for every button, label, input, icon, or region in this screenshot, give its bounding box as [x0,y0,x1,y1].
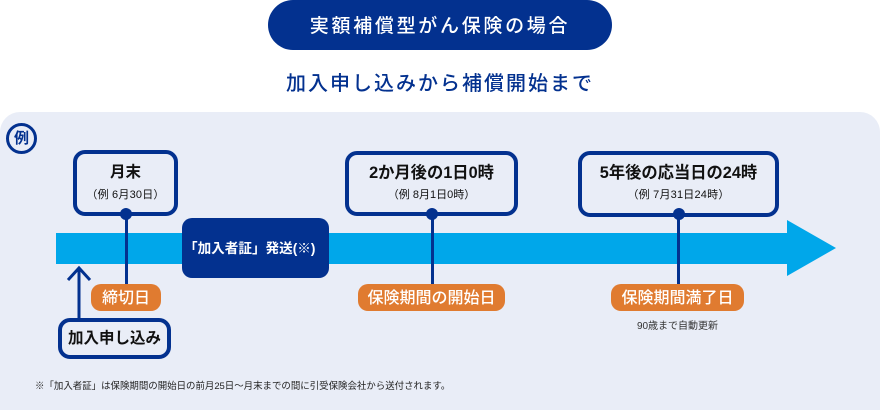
end label: 5年後の応当日の24時 [600,164,757,182]
dot: end date [672,208,684,220]
icon: example badge: 例 [14,130,29,147]
month end example: （例 6月30日） [86,189,165,201]
certificate issue box [182,218,329,278]
callout: five years later [578,151,779,217]
connector: start date [430,212,434,286]
title pill [268,0,612,50]
connector: end date [677,212,680,286]
callout: two months later [345,151,518,216]
callout: month end [73,150,178,216]
icon: example badge [6,123,37,154]
label: deadline [91,284,161,311]
timeline arrow [56,220,836,276]
start example: （例 8月1日0時） [388,189,475,201]
dot: start date [426,208,438,220]
month end label: 月末 [110,164,141,181]
dot: deadline [120,208,132,220]
subtitle: 加入申し込みから補償開始まで [286,73,594,95]
footnote: ※「加入者証」は保険期間の開始日の前月25日～月末までの間に引受保険会社から送付されます。 [35,381,450,392]
callout: application [58,318,171,359]
callout: application: 加入申し込み [68,330,161,347]
end example: （例 7月31日24時） [627,189,730,201]
label: coverage end [611,284,744,311]
certificate issue box: 「加入者証」発送(※) [184,241,315,256]
note: auto renewal: 90歳まで自動更新 [637,321,718,332]
connector: deadline [124,212,128,286]
icon: application arrow [67,266,91,318]
label: coverage start: 保険期間の開始日 [367,290,496,307]
title pill: 実額補償型がん保険の場合 [310,16,570,37]
start label: 2か月後の1日0時 [369,164,494,182]
label: coverage start [358,284,505,311]
label: coverage end: 保険期間満了日 [621,290,734,307]
panel: example timeline [0,112,880,410]
label: deadline: 締切日 [102,290,150,307]
